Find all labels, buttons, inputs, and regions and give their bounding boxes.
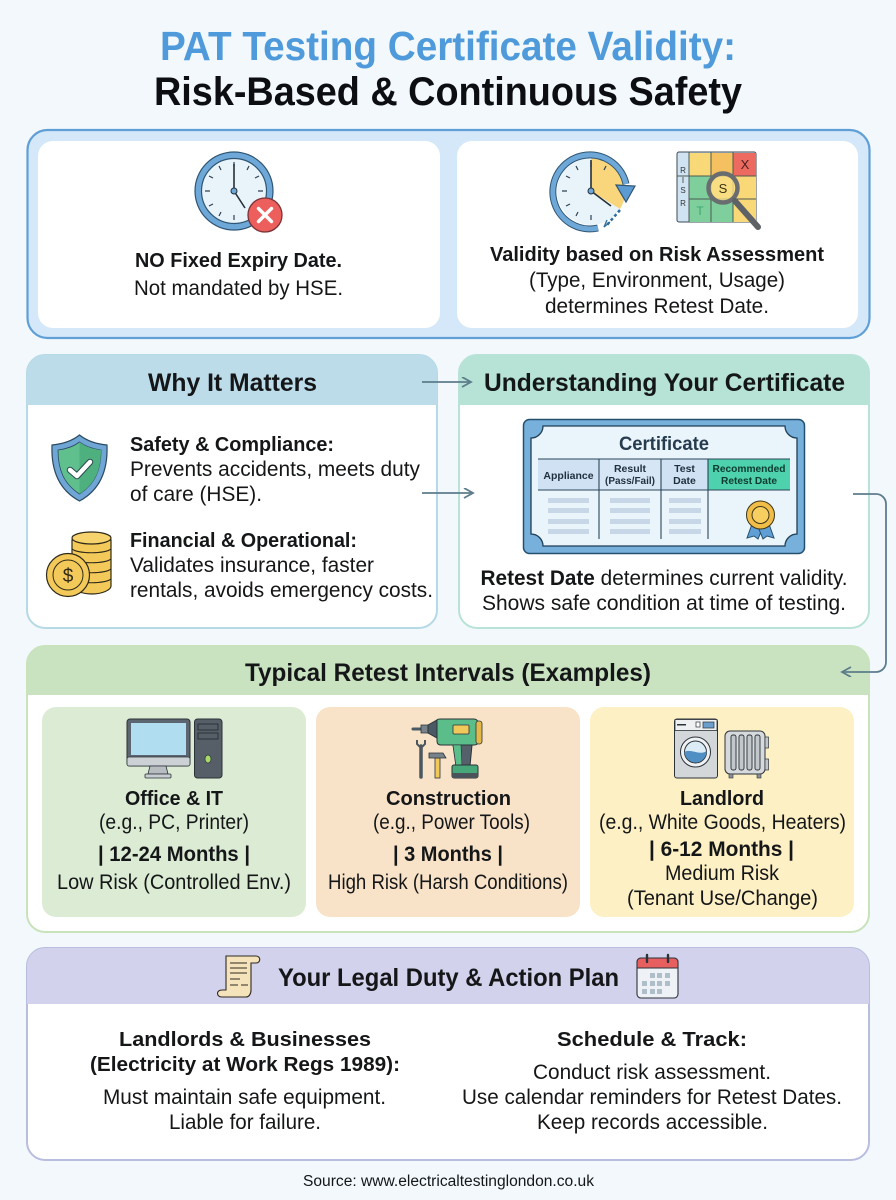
header: why it matters [27,355,437,405]
icon: clock with retest arrow [553,155,635,229]
title: PAT Testing Certificate Validity: [160,23,736,69]
icon: risk matrix with magnifier: S [680,186,686,195]
panel: understanding your certificate [459,355,869,628]
text: office and IT [57,787,291,894]
card: no fixed expiry [38,141,440,328]
text: construction: | 3 Months | [393,843,503,866]
title: Risk-Based & Continuous Safety [154,70,743,114]
text: safety and compliance: of care (HSE). [130,483,262,506]
panel: legal duty and action plan [27,948,869,1160]
header: legal duty and action plan: Your Legal Duty & Action Plan [278,964,619,992]
text: financial and operational [130,530,433,602]
text: financial and operational: Validates insurance, faster [130,554,374,577]
icon: risk matrix with magnifier: S [719,181,728,196]
text: certificate explanation [480,567,848,615]
icon: risk matrix with magnifier: R [680,166,686,175]
text: risk assessment [490,243,824,318]
icon: shield with check [52,435,107,501]
icon: drill and hand tools [413,719,482,778]
text: landlord: (Tenant Use/Change) [627,887,818,910]
text: financial and operational: rentals, avoids emergency costs. [130,579,433,602]
text: office and IT: Low Risk (Controlled Env.) [57,871,291,894]
text: office and IT: | 12-24 Months | [98,843,250,866]
header: why it matters: Why It Matters [148,369,317,397]
header: typical retest intervals [27,646,869,695]
text: schedule and track: Use calendar reminders for Retest Dates. [462,1086,842,1109]
text: no fixed expiry: NO Fixed Expiry Date. [135,249,342,272]
icon: coin stack [46,532,111,596]
arrow: certificate to retest intervals [843,494,886,672]
certificate illustration [524,420,804,554]
certificate table: Date [673,475,696,487]
text: construction: High Risk (Harsh Conditions) [328,871,568,894]
certificate table: Recommended [712,463,786,475]
text: safety and compliance: Safety & Compliance: [130,434,334,456]
icon: desktop computer [127,719,222,778]
text: office and IT: Office & IT [125,787,223,810]
source line: Source: www.electricaltestinglondon.co.uk [303,1173,594,1190]
text: construction [328,787,568,894]
certificate table: Appliance [543,470,594,482]
text: landlord: Landlord [680,787,764,810]
arrow: why it matters to certificate header [422,381,470,383]
panel: typical retest intervals [27,646,869,932]
text: certificate explanation: Shows safe condition at time of testing. [482,592,846,615]
text: landlord [599,787,846,910]
header: legal duty and action plan [27,948,869,1004]
certificate table: Test [674,463,695,475]
icon: legal scroll [218,956,260,997]
text: no fixed expiry [134,249,343,300]
text: schedule and track: Keep records accessible. [537,1111,768,1134]
header: understanding your certificate: Understanding Your Certificate [484,369,845,397]
icon: risk matrix with magnifier: T [696,204,704,218]
text: schedule and track: Conduct risk assessment. [533,1061,771,1084]
text: risk assessment: determines Retest Date. [545,295,769,318]
text: financial and operational: Financial & Operational: [130,530,357,552]
text: schedule and track [462,1028,842,1134]
text: safety and compliance [130,434,420,506]
certificate table [538,459,790,539]
text: risk assessment: (Type, Environment, Usage) [529,269,785,292]
certificate heading: Certificate [619,434,709,455]
card: risk assessment [457,141,858,328]
card: construction [316,707,580,917]
text: landlords and businesses: Must maintain safe equipment. [103,1086,386,1109]
panel: key validity facts [28,130,870,338]
card: landlord [590,707,854,917]
text: landlords and businesses: Landlords & Businesses [119,1028,371,1051]
text: no fixed expiry: Not mandated by HSE. [134,277,343,300]
title [154,23,743,114]
panel: why it matters [27,355,437,628]
text: office and IT: (e.g., PC, Printer) [99,811,249,834]
text: construction: Construction [386,787,511,810]
icon: award rosette [746,501,774,539]
text: landlord: Medium Risk [665,862,779,885]
icon: clock with red cross [195,152,282,232]
icon: washing machine and radiator [674,719,768,778]
header: understanding your certificate [459,355,869,405]
certificate table: Result [614,463,647,475]
text: construction: (e.g., Power Tools) [373,811,530,834]
icon: risk matrix with magnifier: R [680,199,686,208]
certificate table: Retest Date [721,475,777,487]
icon: risk matrix with magnifier: X [741,157,750,172]
icon: calendar [637,955,678,998]
arrow: why it matters to certificate body [422,492,472,494]
icon: risk matrix with magnifier: I [682,176,684,185]
certificate table: (Pass/Fail) [605,476,655,487]
text: safety and compliance: Prevents accidents, meets duty [130,458,420,481]
text: schedule and track: Schedule & Track: [557,1028,747,1051]
icon: risk matrix with magnifier [677,152,758,227]
header: typical retest intervals: Typical Retest Intervals (Examples) [245,659,651,687]
text: risk assessment: Validity based on Risk Assessment [490,243,824,266]
text: landlords and businesses: (Electricity at Work Regs 1989): [90,1053,400,1076]
card: office and IT [42,707,306,917]
text: landlord: | 6-12 Months | [649,838,794,861]
icon: coin stack: $ [63,566,74,587]
text: landlords and businesses: Liable for failure. [169,1111,321,1134]
text: landlord: (e.g., White Goods, Heaters) [599,811,846,834]
text: certificate explanation: Retest Date determines current validity. [480,567,848,590]
text: landlords and businesses [90,1028,400,1134]
